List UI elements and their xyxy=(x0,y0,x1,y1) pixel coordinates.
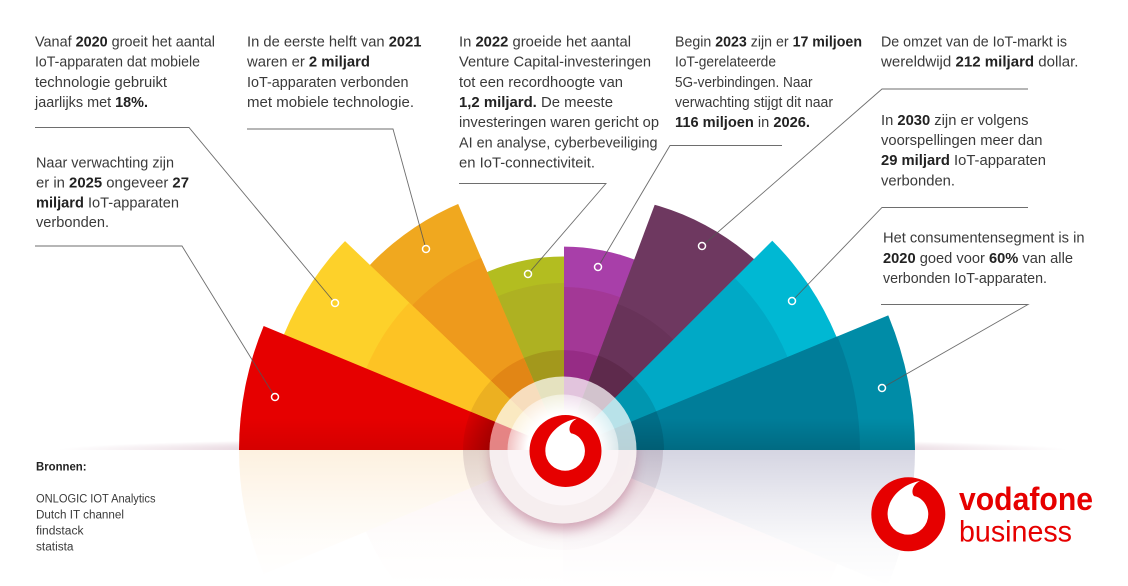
callout: 212 miljard: wereldwijd 212 miljard dollar. xyxy=(880,55,1078,71)
callout: 212 miljard xyxy=(698,34,1078,250)
callout: 2025 27 miljard: Naar verwachting zijn xyxy=(36,155,174,171)
wedge: green xyxy=(487,256,564,412)
wedge: yellow xyxy=(284,241,523,428)
callout: 2023 17 miljoen: verwachting stijgt dit naar xyxy=(675,95,833,111)
callout: 2020 18%: IoT-apparaten dat mobiele xyxy=(35,55,200,71)
leader line xyxy=(35,246,278,400)
callout: 2023 17 miljoen: 5G-verbindingen. Naar xyxy=(675,75,813,91)
callout: 2030 29 miljard: In 2030 zijn er volgens xyxy=(881,113,1028,129)
callout: 2022 1,2 miljard: Venture Capital-investeringen xyxy=(459,55,651,71)
sources: Bronnen: xyxy=(36,462,86,474)
callout: 2020 60%: 2020 goed voor 60% van alle xyxy=(883,251,1073,267)
leader line xyxy=(698,89,1028,250)
callout: 212 miljard: De omzet van de IoT-markt is xyxy=(881,34,1067,50)
leader line xyxy=(247,129,430,252)
sources: ONLOGIC IOT Analytics xyxy=(36,494,156,506)
callout: 2030 29 miljard: verbonden. xyxy=(881,174,955,190)
callout: 2021 2 miljard xyxy=(246,34,430,252)
leader line xyxy=(459,184,606,278)
callout: 2020 60%: verbonden IoT-apparaten. xyxy=(883,271,1047,287)
callout: 2021 2 miljard: waren er 2 miljard xyxy=(246,55,370,71)
vodafone business logo: vodafone xyxy=(959,481,1093,517)
leader line xyxy=(35,128,338,306)
leader line xyxy=(878,304,1028,392)
vodafone business logo: business xyxy=(959,516,1072,548)
leader line xyxy=(594,146,782,270)
callout: 2030 29 miljard: 29 miljard IoT-apparaten xyxy=(881,153,1046,169)
callout: 2022 1,2 miljard xyxy=(459,34,659,278)
callout: 2023 17 miljoen: 116 miljoen in 2026. xyxy=(675,115,810,131)
horizon glow xyxy=(98,442,1027,450)
sources: findstack xyxy=(36,526,84,538)
callout: 2025 27 miljard xyxy=(35,155,278,400)
callout: 2022 1,2 miljard: In 2022 groeide het aantal xyxy=(459,34,631,50)
icon: vodafone mark xyxy=(530,415,602,487)
wedge: purple xyxy=(564,246,634,411)
callout: 2021 2 miljard: IoT-apparaten verbonden xyxy=(247,75,408,91)
callout: 2021 2 miljard: In de eerste helft van 2021 xyxy=(247,34,422,50)
callout: 2025 27 miljard: miljard IoT-apparaten xyxy=(36,196,179,212)
callout: 2025 27 miljard: er in 2025 ongeveer 27 xyxy=(36,176,189,192)
leader line xyxy=(788,208,1028,304)
wedge: teal xyxy=(614,315,915,450)
callout: 2022 1,2 miljard: investeringen waren gericht op xyxy=(459,115,659,131)
callout: 2022 1,2 miljard: en IoT-connectiviteit. xyxy=(459,156,595,172)
wedge: orange xyxy=(370,204,542,412)
sources xyxy=(36,462,156,554)
callout: 2020 18%: Vanaf 2020 groeit het aantal xyxy=(35,34,215,50)
wedge: cyan xyxy=(596,240,836,432)
wedge: plum xyxy=(582,204,754,410)
sources: Dutch IT channel xyxy=(36,510,124,522)
callout: 2030 29 miljard: voorspellingen meer dan xyxy=(881,133,1042,149)
callout: 2020 60% xyxy=(878,231,1084,392)
callout: 2020 18%: jaarlijks met 18%. xyxy=(34,95,148,111)
callout: 2023 17 miljoen xyxy=(594,34,862,270)
callout: 2022 1,2 miljard: AI en analyse, cyberbeveiliging xyxy=(459,136,658,152)
hub disc xyxy=(463,376,663,550)
wedge: red xyxy=(239,326,522,450)
callout: 2020 18% xyxy=(34,34,338,306)
callout: 2022 1,2 miljard: tot een recordhoogte van xyxy=(459,75,623,91)
callout: 2030 29 miljard xyxy=(788,113,1046,304)
reflection below the fan xyxy=(0,450,1128,586)
callout: 2020 60%: Het consumentensegment is in xyxy=(883,231,1084,247)
callout: 2022 1,2 miljard: 1,2 miljard. De meeste xyxy=(459,95,613,111)
sources: statista xyxy=(36,542,74,554)
callout: 2023 17 miljoen: IoT-gerelateerde xyxy=(675,55,776,71)
callout: 2025 27 miljard: verbonden. xyxy=(36,215,109,231)
callout: 2021 2 miljard: met mobiele technologie. xyxy=(247,95,414,111)
fan chart xyxy=(239,204,915,450)
callout: 2020 18%: technologie gebruikt xyxy=(35,75,167,91)
icon: logo mark xyxy=(871,477,945,551)
callout: 2023 17 miljoen: Begin 2023 zijn er 17 miljoen xyxy=(675,34,862,50)
vodafone business logo xyxy=(871,477,1093,551)
